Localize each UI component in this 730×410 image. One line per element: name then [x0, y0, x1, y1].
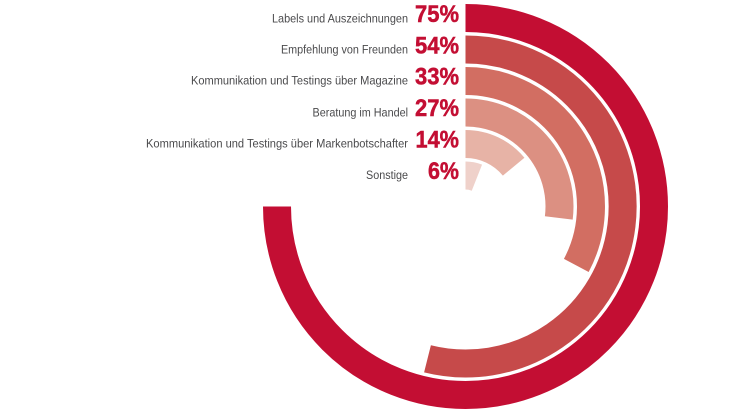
value: 6%: 6%: [428, 158, 459, 185]
label: Labels und Auszeichnungen: Labels und Auszeichnungen: [272, 11, 408, 25]
ring: Sonstige 6%: [466, 176, 477, 178]
label: Kommunikation und Testings über Markenbotschafter: Kommunikation und Testings über Markenbotschafter: [146, 137, 408, 151]
label: Beratung im Handel: Beratung im Handel: [312, 105, 408, 119]
value: 33%: 33%: [415, 64, 459, 91]
ring: Kommunikation und Testings über Magazine 33%: [466, 81, 591, 265]
value: 27%: 27%: [415, 95, 459, 122]
value: 14%: 14%: [416, 126, 459, 154]
ring: Kommunikation und Testings über Markenbotschafter 14%: [466, 144, 514, 167]
value: 75%: 75%: [415, 1, 459, 28]
label: Empfehlung von Freunden: Empfehlung von Freunden: [281, 42, 408, 56]
ring: Labels und Auszeichnungen 75%: [277, 18, 654, 395]
ring: Empfehlung von Freunden 54%: [428, 49, 623, 363]
label: Sonstige: Sonstige: [366, 168, 408, 182]
ring: Beratung im Handel 27%: [466, 112, 559, 218]
label: Kommunikation und Testings über Magazine: Kommunikation und Testings über Magazine: [191, 74, 408, 88]
value: 54%: 54%: [415, 32, 459, 59]
